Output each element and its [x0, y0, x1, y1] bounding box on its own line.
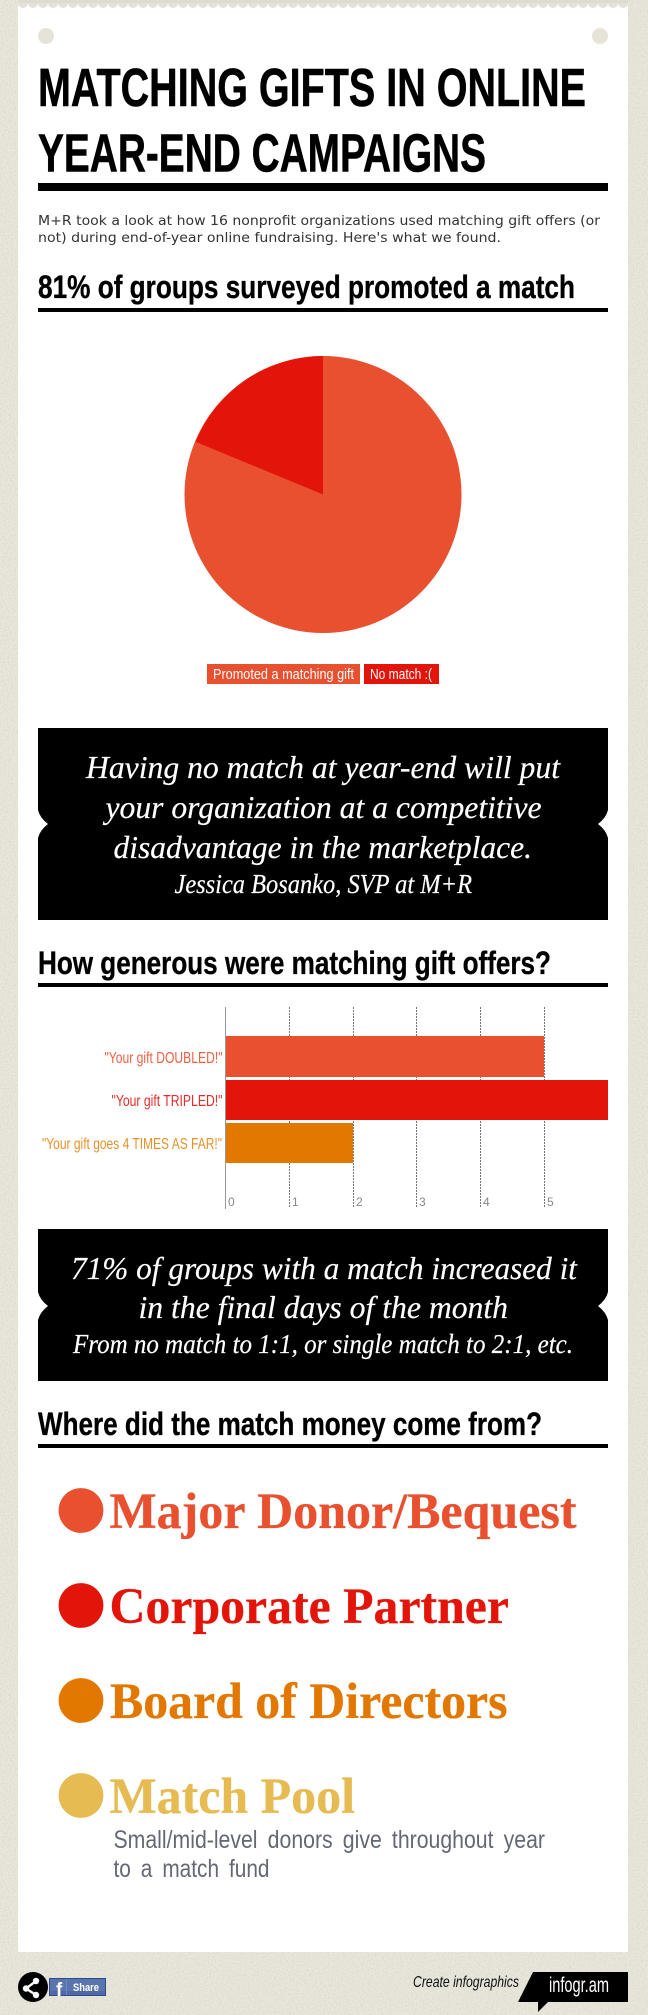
- stat callout: in the final days of the month: [138, 1289, 508, 1325]
- facebook share button: Share: [73, 1982, 99, 1994]
- pie legend: Promoted a matching gift: [213, 667, 354, 683]
- bar: four times: [226, 1123, 353, 1163]
- pie legend: [207, 664, 439, 684]
- bar labels: "Your gift TRIPLED!": [112, 1093, 222, 1110]
- icon: share: [18, 1972, 48, 2002]
- heading: where did the money come from: Where did the match money come from?: [38, 1406, 542, 1442]
- quote callout: your organization at a competitive: [103, 789, 541, 825]
- axis numbers: 0: [228, 1195, 235, 1209]
- source: match pool: Match Pool: [110, 1768, 355, 1824]
- facebook share button: f: [56, 1980, 63, 2001]
- axis numbers: 1: [292, 1195, 299, 1209]
- infogram badge: infogr.am: [549, 1974, 609, 1997]
- bar chart: [42, 1007, 608, 1209]
- source: corporate partner: Corporate Partner: [110, 1578, 509, 1634]
- infogram badge: [518, 1972, 628, 2012]
- pie legend: No match :(: [370, 667, 432, 683]
- quote callout: Having no match at year-end will put: [85, 749, 561, 785]
- bar: doubled: [226, 1036, 544, 1077]
- source: board of directors: Board of Directors: [110, 1673, 508, 1729]
- stat callout: [38, 1229, 608, 1381]
- quote callout: disadvantage in the marketplace.: [114, 829, 532, 865]
- title rule: [38, 183, 608, 191]
- punch hole right: [592, 28, 608, 44]
- quote callout: [38, 728, 608, 920]
- punch hole left: [38, 28, 54, 44]
- heading rule: [38, 308, 608, 312]
- pie chart: [184, 356, 462, 633]
- intro text: [38, 214, 601, 246]
- heading rule: [38, 983, 608, 987]
- facebook share button: [50, 1978, 106, 2001]
- heading rule: [38, 1444, 608, 1448]
- stat callout: 71% of groups with a match increased it: [71, 1250, 578, 1286]
- title: YEAR-END CAMPAIGNS: [38, 124, 486, 184]
- bar: tripled: [226, 1080, 608, 1120]
- axis numbers: 3: [419, 1195, 426, 1209]
- quote callout: Jessica Bosanko, SVP at M+R: [174, 869, 472, 899]
- axis numbers: 2: [356, 1195, 363, 1209]
- match pool description: Small/mid-level donors give throughout year: [114, 1826, 545, 1854]
- title: [38, 58, 586, 184]
- bar labels: "Your gift DOUBLED!": [104, 1050, 222, 1067]
- source: major donor: Major Donor/Bequest: [110, 1483, 577, 1539]
- bar labels: [42, 1050, 222, 1153]
- bar labels: "Your gift goes 4 TIMES AS FAR!": [42, 1136, 222, 1153]
- intro text: M+R took a look at how 16 nonprofit organizations used matching gift offers (or: [38, 214, 601, 229]
- intro text: not) during end-of-year online fundraising. Here's what we found.: [38, 231, 501, 246]
- axis numbers: [228, 1195, 554, 1209]
- axis numbers: 5: [547, 1195, 554, 1209]
- match pool description: [114, 1826, 545, 1883]
- axis numbers: 4: [483, 1195, 490, 1209]
- stat callout: From no match to 1:1, or single match to 2:1, etc.: [72, 1329, 573, 1359]
- match pool description: to a match fund: [114, 1855, 270, 1883]
- create infographics tagline: Create infographics: [413, 1974, 519, 1991]
